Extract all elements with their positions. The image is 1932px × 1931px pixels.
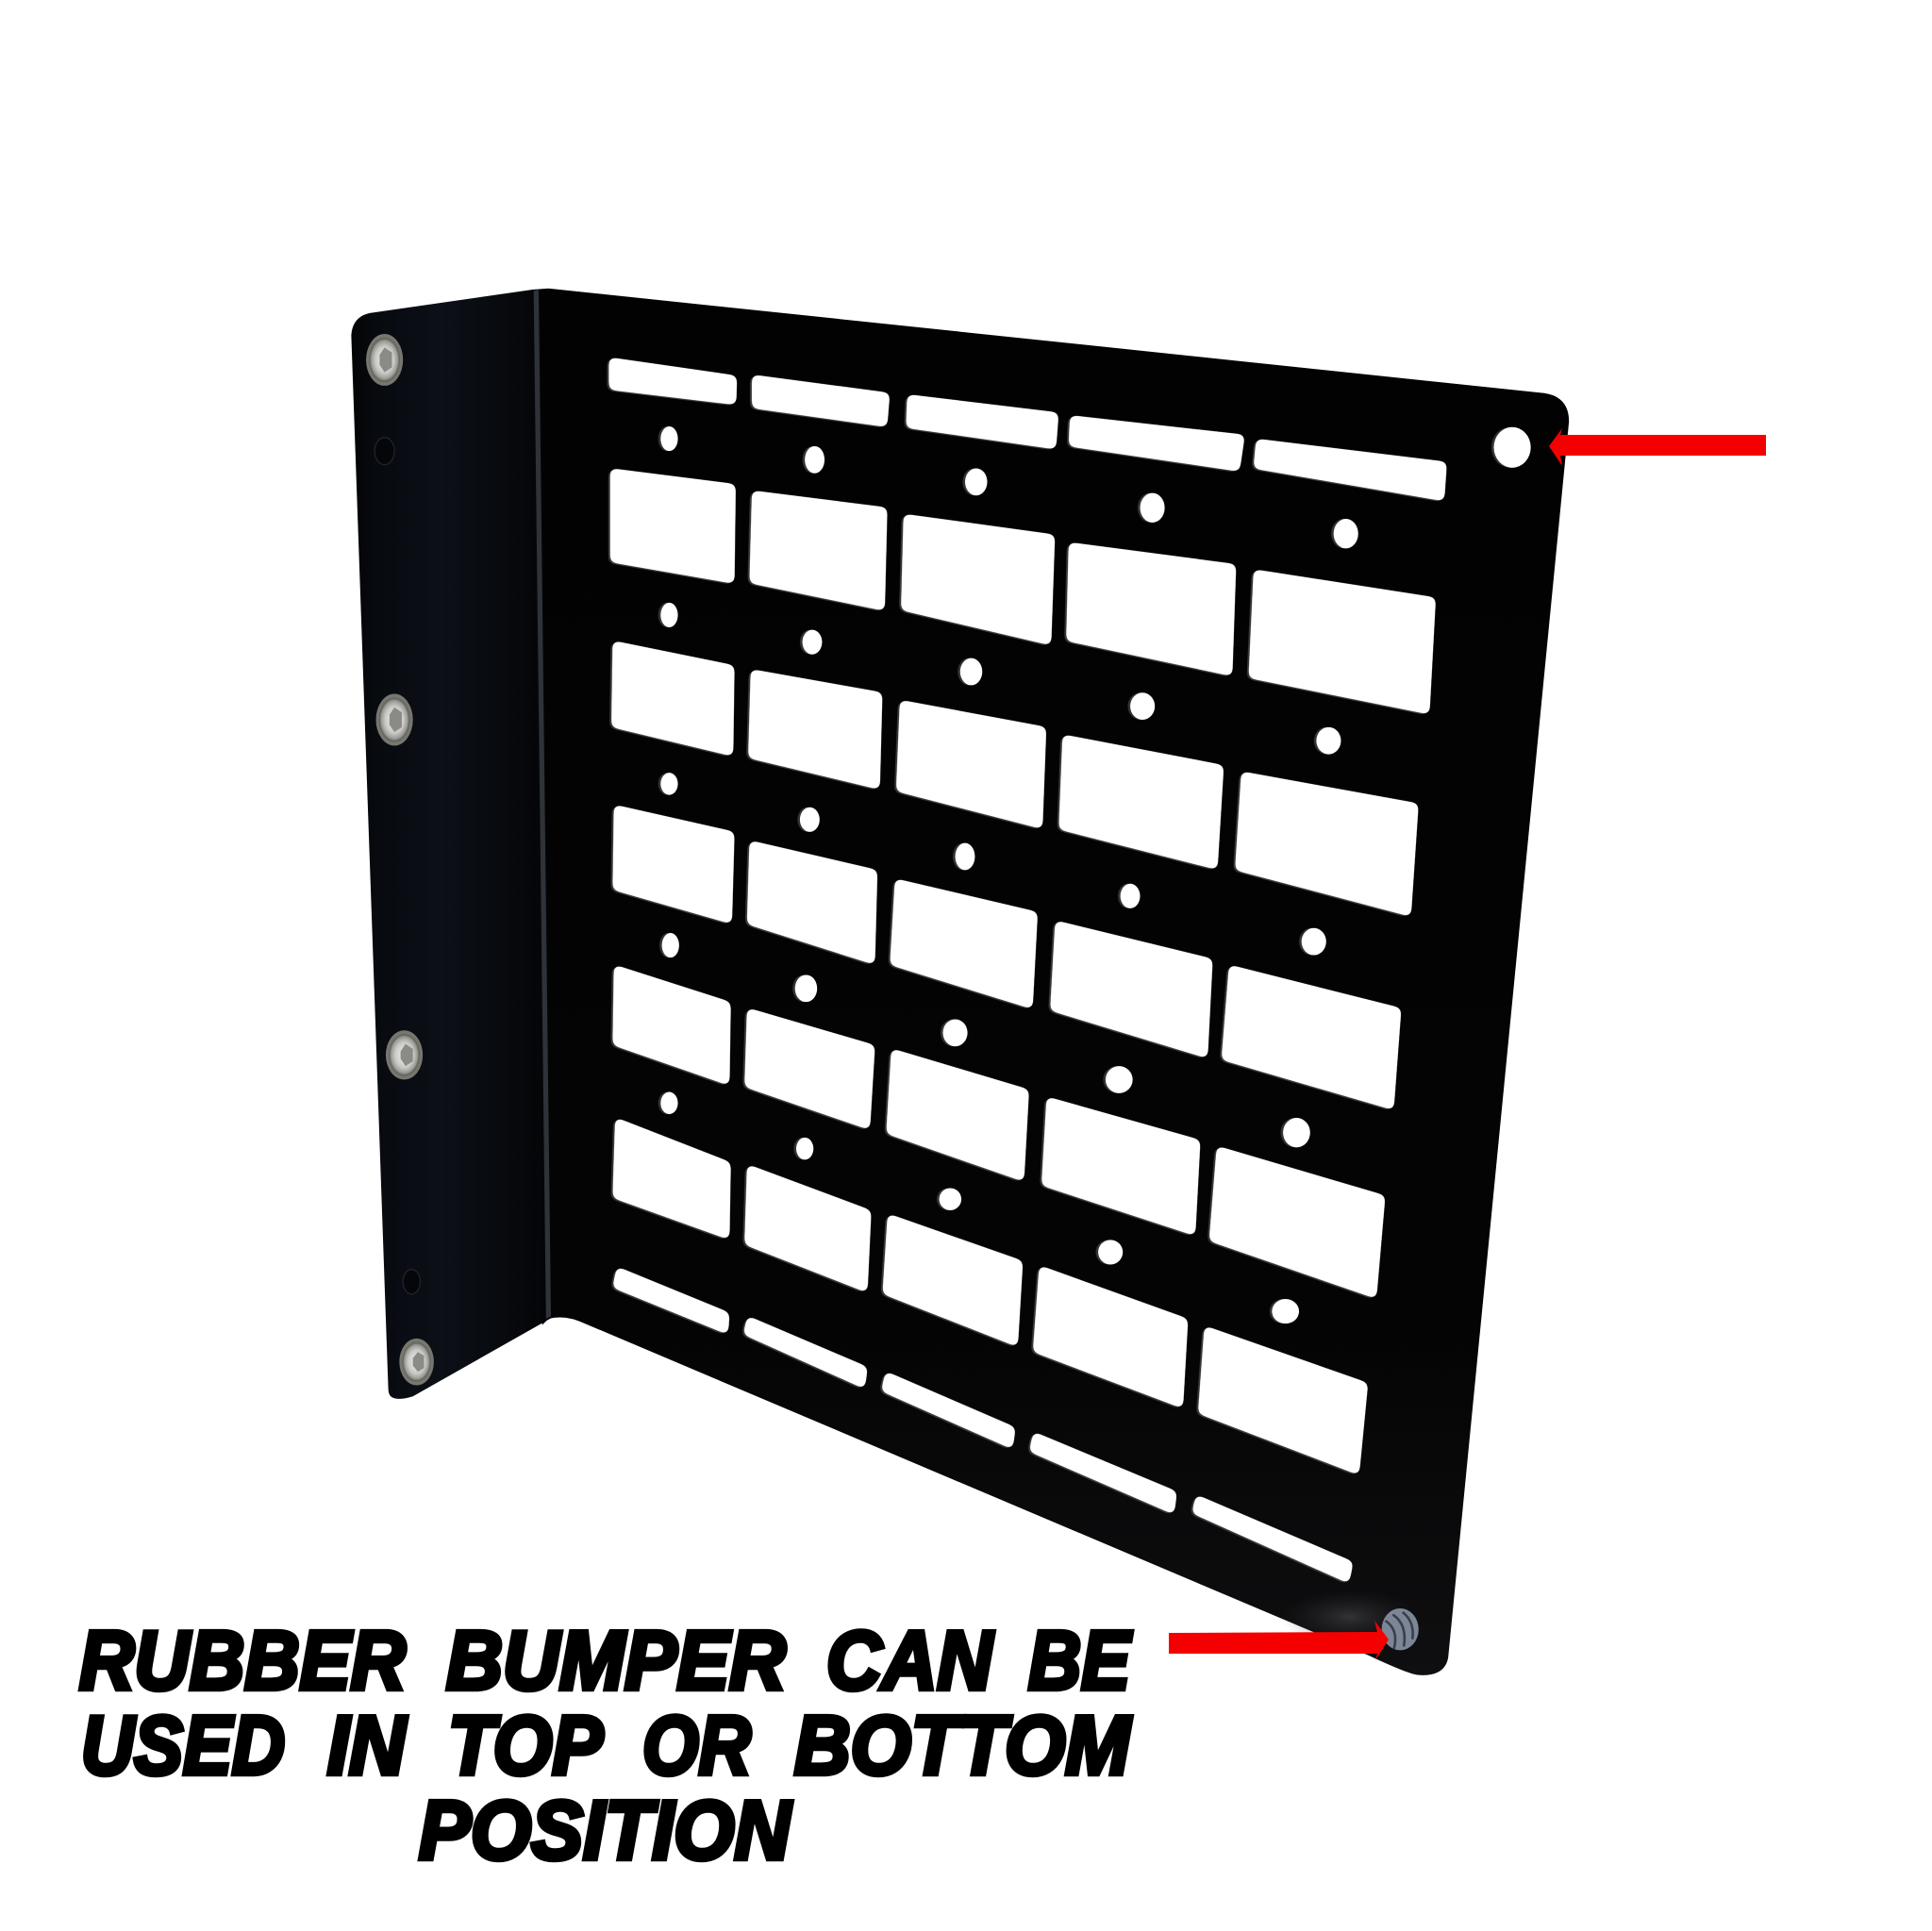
bottom slot row: [614, 1269, 1352, 1581]
caption line 1: BE: [1028, 1613, 1132, 1707]
arrow: top hole: [1549, 428, 1766, 466]
window row 4: [614, 967, 1384, 1296]
caption line 2: IN: [327, 1698, 408, 1792]
panel: side mounting flange: [351, 290, 552, 1399]
caption line 2: [81, 1698, 1132, 1792]
caption line 1: [79, 1613, 1132, 1707]
panel: perforated plate: [532, 289, 1569, 1675]
caption line 1: BUMPER: [446, 1613, 786, 1707]
icon: flange screw 3: [386, 1030, 423, 1079]
arrow: rubber bumper: [1169, 1621, 1389, 1660]
caption line 3: POSITION: [419, 1783, 792, 1877]
rows of round holes: [660, 426, 1531, 1323]
icon: empty top bumper hole: [1493, 427, 1531, 468]
hole row b: [660, 603, 1341, 755]
caption line 2: TOP: [448, 1698, 603, 1792]
top slot row: [610, 359, 1445, 499]
icon: rubber bumper: [1382, 1608, 1419, 1650]
grid of rectangular cut-outs: [610, 359, 1445, 1581]
caption line 1: RUBBER: [79, 1613, 406, 1707]
caption: [79, 1613, 1132, 1877]
hole row d: [662, 933, 1310, 1147]
icon: flange screw 2: [375, 694, 413, 745]
caption line 1: CAN: [826, 1613, 994, 1707]
window row 3: [614, 807, 1400, 1108]
icon: flange screw 4: [399, 1339, 434, 1386]
window row 5: [614, 1120, 1366, 1473]
caption line 2: OR: [642, 1698, 751, 1792]
hole row c: [660, 773, 1326, 956]
window row 2: [613, 642, 1417, 914]
icon: small threaded hole lower: [403, 1270, 421, 1294]
hole row a: [660, 426, 1358, 548]
icon: flange screw 1: [366, 334, 403, 386]
caption line 2: USED: [81, 1698, 285, 1792]
glare near bumper: [1282, 1590, 1417, 1644]
caption line 2: BOTTOM: [794, 1698, 1132, 1792]
icon: small threaded hole upper: [375, 438, 394, 465]
bracket product photo: [351, 289, 1569, 1675]
bend highlight: [534, 290, 551, 1319]
window row 1: [612, 470, 1434, 712]
hole row e: [660, 1092, 1299, 1323]
